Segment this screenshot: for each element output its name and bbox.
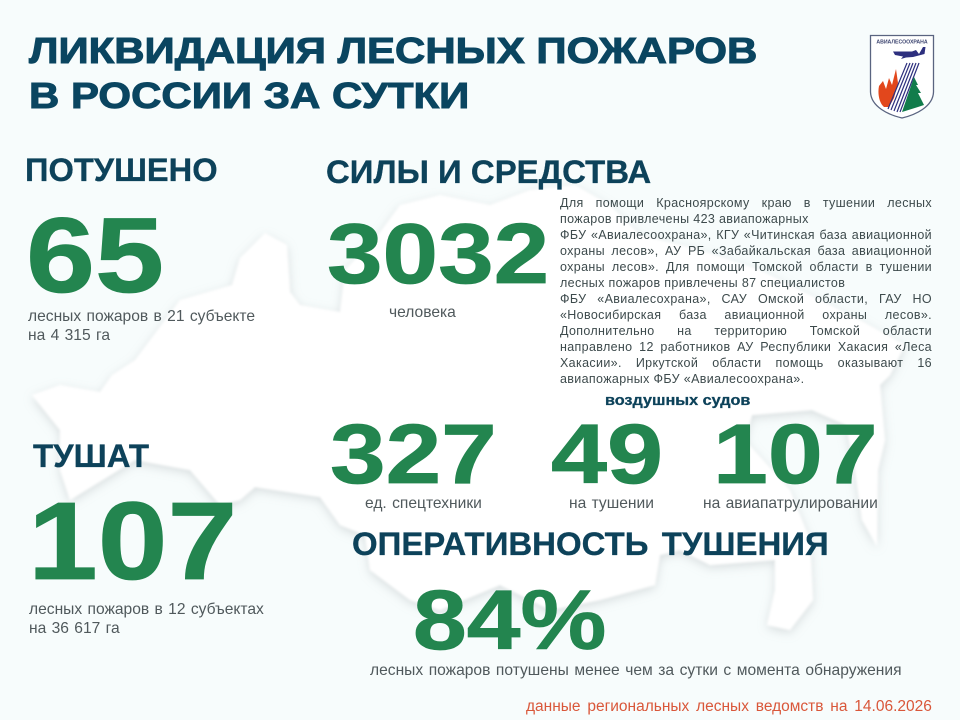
text block: details: ФБУ «Авиалесоохрана», КГУ «Читинская база авиационной (560, 228, 932, 242)
text block: details: Для помощи Красноярскому краю в тушении лесных (560, 196, 932, 210)
label: aircraft: воздушных судов (605, 392, 750, 408)
heading: being extinguished: ТУШАТ (33, 438, 149, 474)
panel: extinguished (25, 152, 255, 344)
number: 107 aircraft: 107 (712, 407, 877, 501)
caption: being extinguished (29, 601, 264, 637)
number: 3032: 3032 (327, 206, 549, 302)
number: 327: 327 (330, 407, 497, 501)
heading: extinguished: ПОТУШЕНО (25, 152, 218, 188)
caption: extinguished: на 4 315 га (28, 327, 110, 344)
text block: details: Дополнительно на территорию Томской области (560, 324, 932, 338)
caption: extinguished: лесных пожаров в 21 субъекте (28, 308, 255, 325)
icon: Avialesookhrana logo (870, 34, 934, 119)
text block: details: пожаров привлечены 423 авиапожарных (560, 212, 809, 226)
source note: данные региональных лесных ведомств на 14.06.2026 (526, 698, 932, 715)
number: 107: 107 (28, 480, 237, 602)
icon: Avialesookhrana logo: АВИАЛЕСООХРАНА (876, 40, 928, 46)
text block: details: ФБУ «Авиалесохрана», САУ Омской области, ГАУ НО (560, 292, 932, 306)
text block: details: охраны лесов», АУ РБ «Забайкальская база авиационной (560, 244, 932, 258)
text block: details (560, 196, 932, 386)
panel: efficiency (352, 526, 902, 679)
caption: firefighting: на тушении (569, 495, 654, 512)
title: ЛИКВИДАЦИЯ ЛЕСНЫХ ПОЖАРОВ (29, 30, 757, 71)
text block: details: Хакасии». Иркутской области помощь оказывают 16 (560, 356, 932, 370)
text block: details: лесных пожаров привлечены 87 специалистов (560, 276, 845, 290)
caption: air patrol: на авиапатрулировании (703, 495, 878, 512)
caption: efficiency: лесных пожаров потушены менее чем за сутки с момента обнаружения (370, 662, 902, 679)
caption: being extinguished: на 36 617 га (29, 620, 120, 637)
title (28, 30, 757, 116)
caption: people: человека (389, 304, 456, 321)
text block: details: направлено 12 работников АУ Республики Хакасия «Леса (560, 340, 932, 354)
heading: forces: СИЛЫ И СРЕДСТВА (326, 154, 651, 190)
caption: vehicles: ед. спецтехники (365, 495, 482, 512)
caption: extinguished (28, 308, 255, 344)
text block: details: охраны лесов». Для помощи Томской области в тушении (560, 260, 932, 274)
number: 84%: 84% (413, 573, 606, 667)
number: 65: 65 (26, 194, 164, 314)
caption: being extinguished: лесных пожаров в 12 субъектах (29, 601, 264, 618)
title: В РОССИИ ЗА СУТКИ (29, 75, 469, 116)
panel: forces and means (326, 154, 932, 512)
text block: details: «Новосибирская база авиационной охраны лесов». (560, 308, 932, 322)
panel: being extinguished (28, 438, 264, 637)
number: 49: 49 (551, 407, 663, 501)
heading: efficiency: ОПЕРАТИВНОСТЬ ТУШЕНИЯ (352, 526, 829, 562)
text block: details: авиапожарных ФБУ «Авиалесоохрана». (560, 372, 804, 386)
